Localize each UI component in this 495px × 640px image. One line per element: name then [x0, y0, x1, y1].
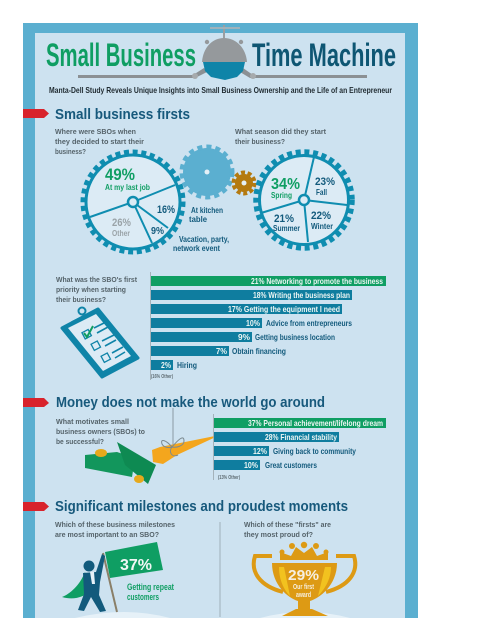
gear chart: where SBOs decided: 9%: [151, 226, 164, 237]
gear chart: where SBOs decided: 49%: [105, 165, 135, 184]
gear chart: where SBOs decided: Other: [112, 229, 130, 238]
bar chart: motivation: Giving back to community: [273, 446, 356, 456]
icon: man with flag: [62, 542, 163, 612]
question: season: What season did they start: [235, 127, 326, 136]
icon: clipboard: [62, 308, 138, 377]
icon: trophy: [254, 542, 355, 616]
bar chart: motivation: 12%: [253, 446, 267, 456]
question: season: their business?: [235, 137, 285, 146]
gear: small gold: [234, 172, 254, 194]
label: vacation, party, network event: [173, 234, 229, 253]
label: getting repeat customers: Getting repeat: [127, 582, 174, 592]
heading: milestones: Significant milestones and proudest moments: [55, 498, 348, 515]
subtitle: Manta-Dell Study Reveals Unique Insights into Small Business Ownership and the Life of an Entrepreneur: [49, 86, 393, 95]
question: where: [55, 127, 144, 156]
gear chart: season: 23%: [315, 176, 335, 188]
bar chart: first priority: 17% Getting the equipment I need: [228, 304, 340, 314]
bar chart: first priority: 7%: [216, 346, 227, 356]
icon: trophy: 29%: [288, 567, 319, 584]
bar chart: first priority: 10%: [246, 318, 260, 328]
title: Time Machine: [252, 37, 396, 73]
gear chart: season: 34%: [271, 176, 300, 193]
bar chart: first priority: Obtain financing: [232, 346, 286, 356]
question: milestones: are most important to an SBO?: [55, 530, 159, 539]
gear chart: season: Winter: [311, 221, 334, 231]
question: motivates: [56, 417, 145, 446]
bar chart: first priority: 21% Networking to promote the business: [251, 276, 383, 286]
heading: small business firsts: Small business firsts: [55, 106, 190, 123]
question: milestones: Which of these business milestones: [55, 520, 175, 529]
question: first priority: priority when starting: [56, 285, 126, 294]
gear chart: season: Spring: [271, 190, 292, 200]
bar chart: first priority: 18% Writing the business plan: [253, 290, 350, 300]
section marker arrow: [23, 398, 49, 407]
question: motivates: What motivates small: [56, 417, 129, 426]
background panel: [23, 23, 418, 618]
bar chart: motivation: [214, 414, 386, 481]
label: at kitchen table: table: [189, 214, 207, 224]
bar chart: first priority: [150, 272, 386, 380]
label: getting repeat customers: [127, 582, 174, 602]
question: season: [235, 127, 326, 146]
gear chart: season: 21%: [274, 213, 294, 225]
bar chart: motivation: 37% Personal achievement/lifelong dream: [248, 418, 383, 428]
label: vacation, party, network event: network event: [173, 243, 220, 253]
question: where: Where were SBOs when: [55, 127, 136, 136]
question: milestones: [55, 520, 175, 539]
gear: large pale blue: [182, 147, 232, 197]
question: motivates: business owners (SBOs) to: [56, 427, 145, 436]
gear chart: season: [256, 152, 352, 248]
question: first priority: What was the SBO's first: [56, 275, 137, 284]
bar chart: first priority: Advice from entrepreneurs: [266, 318, 352, 328]
question: first priority: their business?: [56, 295, 106, 304]
bar chart: first priority: 2%: [161, 360, 171, 370]
gear chart: where SBOs decided: 16%: [157, 204, 175, 216]
label: at kitchen table: At kitchen: [191, 205, 223, 215]
gear chart: season: 22%: [311, 210, 331, 222]
gear chart: where SBOs decided: 26%: [112, 217, 131, 229]
question: motivates: be successful?: [56, 437, 104, 446]
title: [46, 37, 396, 73]
question: where: business?: [55, 147, 86, 156]
icon: snow mounds: [75, 612, 350, 618]
bar chart: motivation: (13% Other): [218, 475, 240, 481]
title: Small Business: [46, 37, 196, 73]
icon: trophy: award: [296, 590, 311, 599]
label: at kitchen table: [189, 205, 223, 224]
icon: man with flag: 37%: [120, 557, 152, 574]
gear chart: where SBOs decided: [83, 152, 183, 252]
bar chart: motivation: 28% Financial stability: [265, 432, 337, 442]
heading: money: Money does not make the world go around: [56, 394, 325, 411]
question: first priority: [56, 275, 137, 304]
gear chart: season: Summer: [273, 223, 301, 233]
bar chart: first priority: 9%: [238, 332, 250, 342]
label: getting repeat customers: customers: [127, 592, 159, 602]
question: firsts: they most proud of?: [244, 530, 313, 539]
question: where: they decided to start their: [55, 137, 144, 146]
icon: money and carrot: [85, 408, 220, 484]
gear chart: where SBOs decided: At my last job: [105, 182, 150, 192]
bar chart: first priority: Hiring: [177, 360, 197, 370]
label: vacation, party, network event: Vacation, party,: [179, 234, 229, 244]
section marker arrow: [23, 109, 49, 118]
bar chart: motivation: Great customers: [265, 460, 317, 470]
bar chart: motivation: 10%: [244, 460, 258, 470]
question: firsts: Which of these "firsts" are: [244, 520, 331, 529]
bar chart: first priority: Getting business location: [255, 332, 335, 342]
section marker arrow: [23, 502, 49, 511]
icon: trophy: Our first: [293, 582, 314, 591]
gear chart: season: Fall: [316, 187, 327, 197]
question: firsts: [244, 520, 331, 539]
icon: time machine: [78, 25, 367, 80]
bar chart: first priority: (16% Other): [151, 374, 173, 380]
